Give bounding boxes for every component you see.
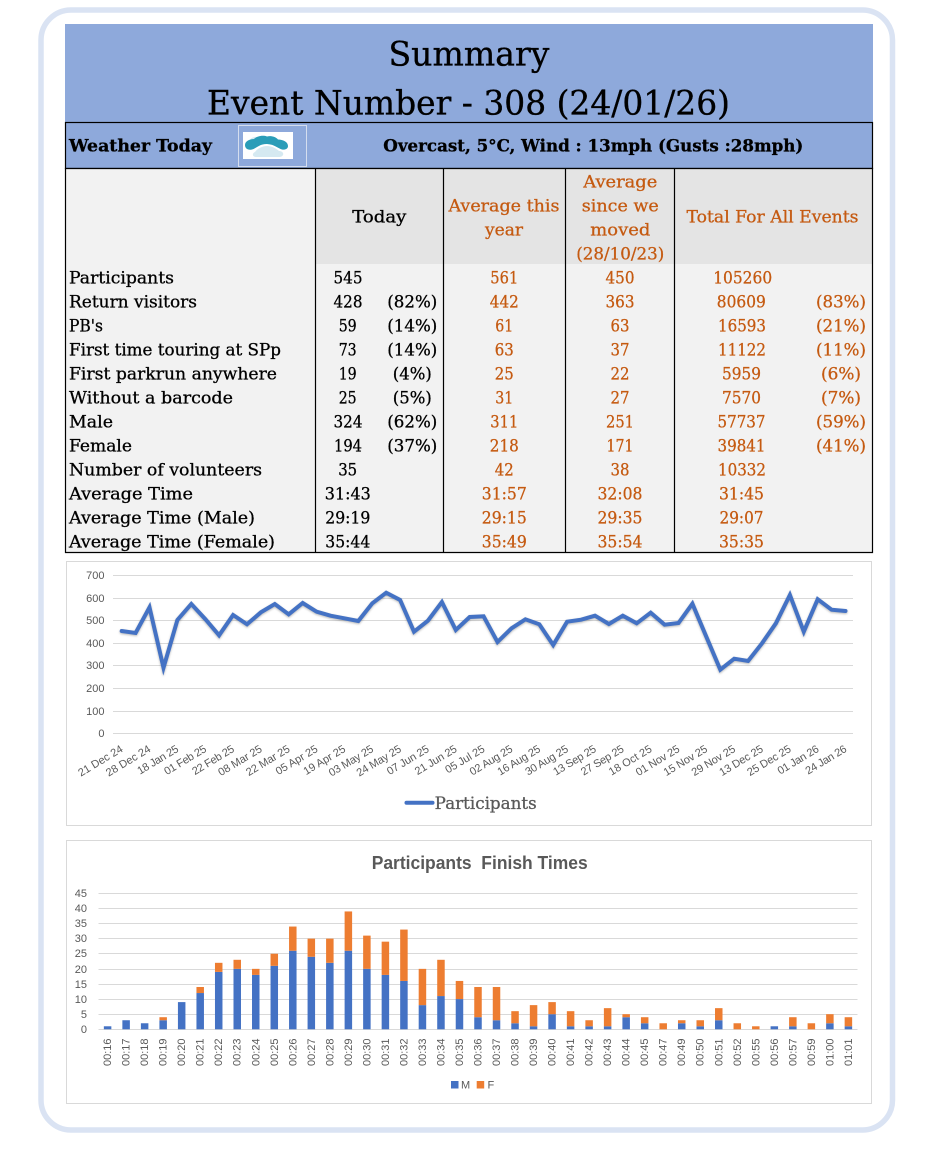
row: number of volunteers: Number of volunteers [69,460,262,480]
x axis date labels: 01 Nov 25 [634,743,682,779]
row: without a barcode: 25 [339,388,357,408]
row: average time: 32:08 [598,484,642,504]
row: male: 251 [606,412,634,432]
x axis time labels: 00:19 [158,1038,170,1066]
row: average time: Average Time [68,484,193,504]
panel: finish times stacked bar chart [66,840,872,1104]
row: male: 311 [490,412,518,432]
row: number of volunteers: 10332 [718,460,766,480]
x axis date labels: 03 May 25 [327,743,376,779]
row: return visitors: (83%) [816,292,866,312]
panel: participants line chart [66,562,872,826]
column heading: average this year: Average this [447,197,560,216]
row: female: 39841 [718,436,766,456]
row: participants: Participants [69,268,174,288]
x axis date labels: 02 Aug 25 [468,743,515,778]
row: average time male: 29:15 [482,508,527,528]
y axis labels: 15 [75,979,87,991]
row: first parkrun anywhere: (6%) [821,364,861,384]
column heading: average this year [447,197,560,240]
x axis time labels: 00:21 [195,1038,207,1066]
x axis date labels: 13 Dec 25 [717,743,766,779]
row: PB's: (21%) [816,316,866,336]
x axis time labels: 01:00 [824,1038,836,1066]
row: PB's: 59 [339,316,357,336]
row: first time touring: (11%) [816,340,866,360]
x axis time labels: 00:18 [139,1038,151,1066]
y axis labels [86,570,104,740]
row: male: (59%) [816,412,866,432]
row: number of volunteers: 38 [610,460,630,480]
row: first parkrun anywhere [69,364,861,384]
row: average time: 31:45 [719,484,764,504]
row: first parkrun anywhere: (4%) [393,364,432,384]
row: first time touring: 37 [610,340,630,360]
row: number of volunteers: 35 [338,460,357,480]
row: average time female: 35:49 [482,532,527,552]
x axis time labels: 00:23 [232,1038,244,1066]
x axis date labels: 05 Jul 25 [443,743,487,776]
row: male: Male [69,412,113,432]
row: female: (37%) [387,436,437,456]
title: Summary: Summary [388,34,550,74]
row: PB's: 61 [495,316,513,336]
x axis date labels: 07 Jun 25 [385,743,431,778]
row: male [69,412,866,432]
x axis date labels: 30 Aug 25 [523,743,571,778]
column heading: total for all events: Total For All Events [686,207,858,226]
x axis time labels: 00:38 [510,1038,522,1066]
x axis time labels: 00:36 [472,1038,484,1066]
y axis labels: 500 [86,615,104,627]
y axis labels: 25 [75,948,87,960]
row: female [69,436,866,456]
row: first parkrun anywhere: 5959 [722,364,761,384]
row: PB's: 16593 [718,316,766,336]
y axis labels: 600 [86,593,104,605]
row: first parkrun anywhere: 22 [610,364,630,384]
x axis date labels: 13 Sep 25 [551,743,599,778]
row: participants: 545 [334,268,362,288]
x axis date labels [76,743,849,779]
x axis date labels: 22 Feb 25 [190,743,237,778]
row: first parkrun anywhere: First parkrun anywhere [69,364,277,384]
line: participants per event [122,593,845,670]
x axis time labels: 00:24 [250,1038,262,1066]
row: first time touring: 63 [495,340,514,360]
row: average time female: 35:35 [719,532,764,552]
row: first time touring: (14%) [387,340,437,360]
row: PB's: (14%) [387,316,437,336]
x axis time labels: 00:20 [176,1038,188,1066]
y axis labels: 200 [86,683,104,695]
y axis labels: 10 [75,994,87,1006]
chart title: Participants Finish Times [372,853,588,873]
row: female: Female [69,436,132,456]
column heading: today: Today [352,208,407,227]
x axis time labels: 00:57 [787,1038,799,1066]
x axis time labels: 00:40 [547,1038,559,1066]
x axis date labels: 28 Dec 24 [104,743,153,779]
weather heading: Weather Today [68,137,212,156]
x axis time labels: 00:37 [491,1038,503,1066]
row: return visitors: 428 [334,292,362,312]
x axis date labels: 18 Jan 25 [135,743,181,777]
x axis time labels: 00:43 [602,1038,614,1066]
x axis time labels: 00:41 [565,1038,577,1066]
row: PB's [69,316,866,336]
y axis labels: 100 [86,706,104,718]
row: average time female: Average Time (Female) [68,532,275,552]
female bars [159,911,852,1029]
icon: overcast cloud [238,126,306,166]
row: female: 171 [606,436,634,456]
row: average time male: Average Time (Male) [68,508,255,528]
y axis labels: 20 [75,964,87,976]
y axis labels: 0 [98,728,104,740]
x axis time labels: 00:22 [213,1038,225,1066]
y axis labels: 700 [86,570,104,582]
row: average time female: 35:54 [598,532,642,552]
statistics table [66,168,872,552]
x axis time labels: 00:39 [528,1038,540,1066]
row: participants: 561 [490,268,518,288]
y axis labels: 400 [86,638,104,650]
x axis date labels: 15 Nov 25 [662,743,710,779]
x axis date labels: 27 Sep 25 [579,743,626,778]
row: average time: 31:57 [482,484,527,504]
row: without a barcode: 27 [610,388,630,408]
row: average time male: 29:07 [720,508,764,528]
row: first parkrun anywhere: 25 [495,364,514,384]
x axis time labels: 00:56 [769,1038,781,1066]
title: event number: Event Number - 308 (24/01/26) [207,84,730,124]
x axis time labels: 00:51 [713,1038,725,1066]
y axis labels: 300 [86,660,104,672]
column heading: average since we moved: Average [582,173,657,192]
row: return visitors [69,292,866,312]
x axis time labels: 00:26 [287,1038,299,1066]
row: average time female: 35:44 [325,532,370,552]
row: return visitors: 442 [490,292,519,312]
x axis time labels: 00:45 [639,1038,651,1066]
row: female: 194 [334,436,362,456]
legend: male and female: M [461,1080,470,1092]
x axis date labels: 29 Nov 25 [690,743,738,779]
row: female: (41%) [816,436,866,456]
row: without a barcode: 7570 [722,388,761,408]
row: first parkrun anywhere: 19 [339,364,357,384]
y axis labels: 45 [75,888,87,900]
x axis time labels: 00:31 [380,1038,392,1066]
x axis date labels: 25 Dec 25 [745,743,793,779]
row: without a barcode: Without a barcode [69,388,233,408]
row: average time female [68,532,764,552]
row: return visitors: 363 [606,292,634,312]
x axis time labels: 00:35 [454,1038,466,1066]
x axis date labels: 01 Jan 26 [776,743,821,777]
row: without a barcode [69,388,861,408]
row: female: 218 [490,436,519,456]
row: first time touring [69,340,866,360]
x axis date labels: 18 Oct 25 [607,743,654,778]
y axis labels: 30 [75,933,87,945]
row: average time male [68,508,763,528]
x axis time labels: 00:17 [121,1038,133,1066]
y axis labels: 0 [81,1024,87,1036]
legend: participants: Participants [435,794,537,813]
x axis date labels: 01 Feb 25 [162,743,209,778]
row: male: 324 [334,412,362,432]
x axis time labels: 00:27 [306,1038,318,1066]
x axis date labels: 24 Jan 26 [803,743,849,777]
row: first time touring: First time touring at SPp [69,340,281,360]
x axis time labels: 00:44 [621,1038,633,1066]
row: male: (62%) [387,412,437,432]
row: average time [68,484,764,504]
x axis date labels: 08 Mar 25 [216,743,264,779]
weather conditions: Overcast, 5°C, Wind : 13mph (Gusts :28mph) [383,137,803,156]
row: without a barcode: (5%) [393,388,432,408]
x axis date labels: 21 Dec 24 [76,743,125,779]
column heading: average since we moved: moved [590,221,651,240]
row: number of volunteers: 42 [495,460,514,480]
column heading: average since we moved [576,173,664,264]
x axis date labels: 05 Apr 25 [274,743,320,778]
legend: male and female: F [488,1080,494,1092]
legend: male and female [451,1080,494,1092]
row: PB's: PB's [69,316,103,336]
row: PB's: 63 [610,316,630,336]
x axis date labels: 24 May 25 [355,743,404,779]
x axis time labels: 00:42 [584,1038,596,1066]
column heading: average this year: year [484,221,523,240]
x axis time labels: 00:32 [398,1038,410,1066]
row: average time male: 29:19 [325,508,370,528]
row: number of volunteers [69,460,766,480]
x axis time labels: 00:25 [269,1038,281,1066]
x axis time labels: 00:16 [102,1038,114,1066]
row: participants: 105260 [713,268,772,288]
row: average time male: 29:35 [598,508,642,528]
x axis time labels: 00:47 [658,1038,670,1066]
x axis time labels: 00:55 [750,1038,762,1066]
x axis time labels: 00:30 [361,1038,373,1066]
y axis labels [75,888,87,1036]
row: first time touring: 73 [339,340,357,360]
row: return visitors: Return visitors [69,292,197,312]
x axis time labels: 00:29 [343,1038,355,1066]
title banner [65,24,873,124]
x axis date labels: 22 Mar 25 [244,743,292,779]
row: without a barcode: (7%) [821,388,861,408]
x axis time labels: 01:01 [843,1038,855,1066]
x axis time labels: 00:52 [732,1038,744,1066]
row: without a barcode: 31 [495,388,513,408]
column heading: average since we moved: since we [582,197,659,216]
row: average time: 31:43 [325,484,371,504]
row: return visitors: 80609 [717,292,766,312]
x axis time labels: 00:59 [806,1038,818,1066]
column heading: average since we moved: (28/10/23) [576,244,664,264]
x axis time labels: 00:50 [695,1038,707,1066]
x axis date labels: 19 Apr 25 [301,743,348,778]
row: first time touring: 11122 [718,340,766,360]
row: male: 57737 [718,412,766,432]
x axis date labels: 21 Jun 25 [413,743,459,778]
y axis labels: 5 [81,1009,87,1021]
x axis time labels: 00:34 [436,1038,448,1066]
x axis date labels: 16 Aug 25 [496,743,543,778]
row: return visitors: (82%) [387,292,437,312]
x axis time labels: 00:33 [417,1038,429,1066]
y axis labels: 40 [75,903,87,915]
male bars [104,951,852,1029]
weather row [66,122,872,168]
row: participants [69,268,772,288]
x axis time labels: 00:28 [324,1038,336,1066]
x axis time labels [102,1038,855,1066]
y axis labels: 35 [75,918,87,930]
x axis time labels: 00:49 [676,1038,688,1066]
row: participants: 450 [606,268,634,288]
